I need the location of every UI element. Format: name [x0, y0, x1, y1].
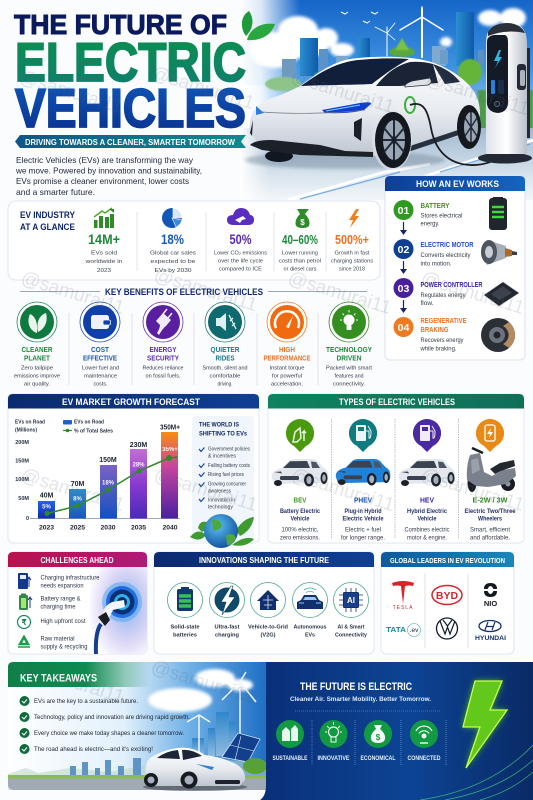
icon: bolt — [349, 209, 359, 228]
benefit: energy security: SECURITY — [147, 356, 179, 362]
benefit: cost effective: EFFECTIVE — [83, 356, 117, 362]
watermark: @samurai11 — [289, 67, 397, 118]
stat: 40-60%: Lower running — [282, 250, 318, 256]
heading: at a glance: AT A GLANCE — [20, 222, 75, 233]
step 1: battery: Stores electrical — [420, 212, 462, 220]
title: THE FUTURE OF — [14, 9, 227, 40]
callout: the world is shifting to EVs: Rising fuel prices — [208, 472, 244, 478]
panel: innovations shaping the future — [154, 552, 374, 654]
heading: THE FUTURE IS ELECTRIC — [300, 681, 412, 693]
legend: EVs on Road — [74, 420, 104, 426]
bar chart: 28% — [132, 462, 145, 468]
stat: 14M+: EVs sold — [91, 250, 117, 256]
intro text: and a smarter future. — [16, 187, 95, 197]
stat: 50%: Lower CO₂ emissions — [214, 250, 267, 256]
step 1: battery: energy. — [420, 220, 440, 228]
step 3: power controller: 03 — [398, 283, 409, 295]
callout: the world is shifting to EVs: Falling battery costs — [208, 463, 250, 469]
step 1: battery: 01 — [398, 205, 409, 217]
stat: 14M+: 14M+ — [88, 232, 120, 247]
header — [268, 394, 524, 408]
logo: Hyundai: HYUNDAI — [475, 636, 506, 642]
icon: recycling — [18, 637, 30, 647]
stat: 40-60%: costs than petrol — [279, 258, 321, 264]
takeaway list: The road ahead is electric—and it's exciting! — [34, 747, 153, 753]
callout: the world is shifting to EVs: technology — [208, 504, 233, 510]
type: BEV: Battery Electric — [280, 509, 321, 515]
innovation: solid-state batteries — [168, 582, 202, 638]
type: HEV: Hybrid Electric — [407, 509, 448, 515]
bar chart: 8% — [73, 496, 83, 502]
watermark: @samurai11 — [149, 657, 257, 708]
innovation: AI connectivity: AI & Smart — [338, 624, 365, 630]
logo: Tata.ev — [386, 624, 420, 636]
takeaway list: Every choice we make today shapes a cleaner tomorrow. — [34, 731, 184, 737]
watermark: @samurai11 — [289, 465, 397, 516]
value: innovative: INNOVATIVE — [318, 756, 350, 762]
stat: 18%: EVs by 2030 — [154, 268, 192, 274]
header: GLOBAL LEADERS IN EV REVOLUTION — [390, 556, 505, 565]
header — [154, 552, 374, 567]
bar chart: 0 — [26, 516, 29, 522]
step 1: battery: BATTERY — [420, 203, 450, 210]
panel: challenges ahead — [8, 552, 147, 654]
type: PHEV — [336, 419, 390, 542]
type: HEV: Vehicle — [418, 516, 437, 522]
panel: EV industry at a glance — [8, 201, 380, 280]
bar chart: 50M — [18, 496, 29, 502]
step 4: regenerative braking — [394, 317, 515, 352]
step 4: regenerative braking: while braking. — [420, 346, 457, 352]
icon: rupee coin: ₹ — [21, 618, 27, 627]
bar chart: 2025 — [70, 524, 85, 532]
benefit: high performance — [264, 302, 311, 388]
intro text: EVs promise a cleaner environment, lower costs — [16, 176, 189, 186]
step 4: regenerative braking: 04 — [398, 322, 409, 334]
innovation: solid-state batteries: Solid-state — [170, 624, 200, 630]
innovation: AI connectivity: Connectivity — [335, 632, 368, 638]
stat: 50% — [214, 232, 267, 272]
benefit: cost effective: COST — [91, 347, 110, 354]
step 3: power controller: Regulates energy — [420, 292, 466, 299]
bar chart: 18% — [102, 480, 115, 486]
step 3: power controller — [394, 278, 519, 307]
type: BEV: zero emissions. — [280, 536, 320, 542]
stat: 40-60%: or diesel cars — [284, 266, 317, 272]
innovation: autonomous EVs: EVs — [305, 632, 315, 638]
icon: money bag: $ — [300, 218, 305, 227]
subtitle ribbon: DRIVING TOWARDS A CLEANER, SMARTER TOMORROW — [25, 138, 235, 147]
type: E-2W / 3W — [464, 419, 516, 542]
benefit: energy security: Reduces reliance — [142, 366, 184, 372]
item: raw material: Raw material — [40, 636, 74, 642]
header: HOW AN EV WORKS — [416, 179, 499, 190]
icon: pie chart — [162, 208, 182, 228]
legend — [15, 420, 113, 434]
step 4: regenerative braking: BRAKING — [420, 327, 449, 334]
logo: Tata.ev: .ev — [410, 627, 419, 634]
innovation: ultra-fast charging — [210, 582, 244, 638]
heading — [290, 681, 431, 703]
benefit: cleaner planet: emissions improve — [14, 374, 60, 380]
step 2: electric motor: ELECTRIC MOTOR — [420, 242, 474, 249]
item: battery range — [40, 596, 80, 610]
panel: types of electric vehicles — [268, 394, 524, 543]
legend: EVs on Road — [15, 420, 45, 426]
benefit: high performance: for powerful — [272, 374, 302, 380]
watermark: @samurai11 — [286, 268, 394, 319]
bar chart: 100M — [15, 477, 29, 483]
benefit: quieter rides — [202, 302, 248, 388]
value: sustainable: SUSTAINABLE — [272, 756, 308, 762]
benefit: quieter rides: QUIETER — [210, 347, 240, 354]
benefit: high performance: Instant torque — [270, 366, 304, 372]
callout: the world is shifting to EVs: Government policies — [208, 446, 250, 452]
item: infrastructure: Charging infrastructure — [40, 576, 100, 582]
value: economical — [360, 720, 396, 762]
charging station — [410, 23, 532, 165]
car illustration — [143, 748, 247, 791]
callout: the world is shifting to EVs — [192, 416, 254, 543]
bar chart: 350M+ — [160, 424, 180, 432]
logo: NIO: NIO — [484, 599, 497, 608]
watermark: @samurai11 — [19, 657, 127, 708]
watermark: @samurai11 — [149, 63, 257, 114]
watermark: @samurai11 — [19, 465, 127, 516]
item: battery range: Battery range & — [40, 596, 80, 602]
step 3: power controller: flow. — [420, 300, 434, 307]
value: economical: ECONOMICAL — [360, 756, 396, 762]
legend: (Millions) — [15, 428, 37, 434]
value: economical: $ — [376, 733, 381, 742]
bar chart: 230M — [130, 442, 147, 449]
decorative streaks — [420, 745, 533, 800]
step 2: electric motor: 02 — [398, 244, 409, 256]
innovation: autonomous EVs: Autonomous — [294, 624, 326, 630]
icon: globe with leaves — [190, 514, 254, 548]
watermark: @samurai11 — [419, 268, 527, 319]
step 2: electric motor: into motion. — [420, 260, 452, 268]
plug illustration — [90, 567, 147, 654]
logo: Volkswagen — [436, 618, 458, 639]
header: CHALLENGES AHEAD — [40, 555, 114, 565]
step 3: power controller: POWER CONTROLLER — [420, 282, 482, 289]
benefit: high performance: acceleration. — [271, 382, 303, 388]
stat: 500%+: 500%+ — [335, 232, 369, 247]
callout: the world is shifting to EVs: & incentives — [208, 454, 236, 460]
benefit: technology driven: TECHNOLOGY — [326, 347, 372, 354]
type: E-2W / 3W: Wheelers — [478, 516, 503, 522]
intro text — [15, 155, 202, 197]
type: HEV: motor & engine. — [407, 536, 447, 542]
item: infrastructure — [40, 576, 100, 590]
item: raw material — [40, 636, 88, 650]
benefit: quieter rides: RIDES — [216, 356, 235, 362]
watermark: @samurai11 — [152, 465, 260, 516]
icon: leaves — [242, 11, 275, 40]
type: E-2W / 3W: and affordable. — [470, 536, 510, 542]
bar chart: 2023 — [39, 524, 54, 532]
callout: the world is shifting to EVs: THE WORLD IS — [199, 422, 239, 428]
step 2: electric motor — [394, 239, 517, 268]
value: connected: CONNECTED — [408, 756, 441, 762]
benefit: technology driven: features and — [334, 374, 364, 380]
type: PHEV: Electric Vehicle — [342, 516, 384, 522]
header: key takeaways: KEY TAKEAWAYS — [20, 672, 97, 684]
stat: 500%+: charging stations — [331, 258, 373, 264]
innovation: ultra-fast charging: Ultra-fast — [214, 624, 240, 630]
panel: key takeaways — [8, 662, 267, 791]
bar chart: 2035 — [131, 524, 146, 532]
type: E-2W / 3W: E-2W / 3W — [472, 496, 508, 504]
benefit: high performance: PERFORMANCE — [264, 356, 311, 362]
benefit: technology driven: connectivity. — [333, 382, 366, 388]
benefit: cost effective: maintenance — [84, 374, 117, 380]
bar chart: 5% — [42, 504, 52, 510]
stat: 18%: expected to be — [150, 259, 196, 265]
panel: global leaders — [381, 552, 514, 654]
stat: 500%+: since 2018 — [339, 266, 365, 272]
innovation: ultra-fast charging: charging — [215, 632, 239, 638]
scooter — [467, 448, 516, 492]
icon: growth chart — [94, 208, 114, 228]
takeaway list: Technology, policy and innovation are driving rapid growth. — [34, 715, 190, 721]
bar chart: 150M — [99, 457, 117, 464]
hero illustration: electric car charging in a city — [240, 0, 533, 200]
bar chart: 40M — [40, 492, 53, 500]
icon: neon lightning bolt — [463, 681, 507, 768]
logo: Tata.ev: TATA — [386, 625, 407, 634]
callout: the world is shifting to EVs: awareness — [208, 488, 231, 494]
benefit: cleaner planet: air quality. — [24, 382, 50, 388]
panel: the future is electric — [260, 662, 533, 800]
innovation: solid-state batteries: batteries — [173, 632, 197, 638]
watermark: @samurai11 — [19, 268, 127, 319]
type: PHEV: Electric + fuel — [345, 528, 381, 534]
header — [385, 176, 525, 191]
watermark — [17, 63, 532, 708]
type: HEV — [399, 419, 455, 542]
benefit: energy security: on fossil fuels. — [146, 374, 181, 380]
benefit: cleaner planet — [14, 302, 60, 388]
stat: 40-60% — [279, 232, 321, 272]
innovation: AI connectivity: AI — [347, 596, 355, 605]
type: PHEV: PHEV — [354, 496, 372, 504]
item: infrastructure: needs expansion — [40, 584, 84, 590]
logo: BYD: BYD — [436, 590, 459, 602]
benefit: high performance: HIGH — [279, 347, 295, 354]
watermark: @samurai11 — [17, 67, 125, 118]
item: upfront cost: High upfront cost — [40, 619, 86, 625]
innovation: vehicle-to-grid: (V2G) — [260, 632, 276, 638]
step 4: regenerative braking: Recovers energy — [420, 337, 464, 344]
step 1: battery — [394, 197, 507, 230]
electric car — [245, 57, 481, 170]
stat: 500%+: Growth in fast — [334, 250, 370, 256]
header: INNOVATIONS SHAPING THE FUTURE — [199, 555, 329, 565]
bar chart — [15, 424, 180, 532]
callout: the world is shifting to EVs: SHIFTING TO EVs — [199, 430, 247, 438]
scene: wind turbines, city and solar panel — [8, 669, 267, 790]
innovation: vehicle-to-grid: Vehicle-to-Grid — [248, 624, 288, 630]
title: VEHICLES — [15, 77, 246, 139]
type: BEV: BEV — [294, 496, 306, 504]
legend: % of Total Sales — [74, 428, 113, 434]
stat: 500%+ — [331, 232, 373, 272]
header: TYPES OF ELECTRIC VEHICLES — [339, 397, 455, 408]
takeaway list — [20, 696, 190, 754]
value: connected — [408, 720, 441, 762]
innovation: AI connectivity — [334, 582, 368, 638]
subtitle ribbon — [15, 135, 246, 148]
icon: battery — [19, 594, 32, 610]
benefit: energy security — [142, 302, 184, 380]
title — [14, 9, 246, 139]
value: innovative — [318, 720, 350, 762]
benefit: quieter rides: comfortable — [210, 374, 240, 380]
benefit: energy security: ENERGY — [150, 347, 177, 354]
stat: 18%: Global car sales — [150, 250, 196, 256]
heading: at a glance — [20, 210, 76, 233]
heading: key benefits: KEY BENEFITS OF ELECTRIC VEHICLES — [105, 287, 263, 297]
benefit: cost effective: costs. — [94, 382, 108, 388]
watermark: @samurai11 — [152, 265, 260, 316]
type: BEV: 100% electric, — [282, 528, 319, 534]
bar chart: 200M — [15, 440, 29, 446]
heading: Cleaner Air. Smarter Mobility. Better Tomorrow. — [290, 696, 431, 703]
stat: 18%: 18% — [161, 232, 184, 247]
innovation: autonomous EVs — [292, 582, 328, 638]
panel: how an EV works — [385, 176, 525, 360]
item: battery range: charging time — [40, 604, 76, 610]
stat: 50%: 50% — [230, 232, 252, 247]
stat: 14M+: worldwide in — [84, 259, 122, 265]
type: BEV: Vehicle — [290, 516, 310, 522]
type: HEV: Combines electric — [404, 528, 450, 534]
step arrows — [400, 222, 407, 313]
benefit: cleaner planet: Zero tailpipe — [21, 366, 53, 372]
innovation: vehicle-to-grid — [248, 582, 288, 638]
step 4: regenerative braking: REGENERATIVE — [420, 318, 467, 325]
heading: at a glance: EV INDUSTRY — [20, 210, 76, 221]
bar chart: 2040 — [162, 524, 178, 532]
benefit: cleaner planet: CLEANER — [22, 347, 52, 354]
step 2: electric motor: Converts electricity — [420, 252, 471, 259]
panel: EV market growth forecast — [8, 394, 259, 548]
icon: charging station — [18, 573, 31, 589]
icon: money bag — [295, 209, 310, 228]
benefit: quieter rides: driving. — [218, 382, 233, 388]
intro text: Electric Vehicles (EVs) are transforming the way — [16, 155, 194, 165]
type: PHEV: Plug-in Hybrid — [344, 509, 382, 515]
bar chart: 35%+ — [162, 447, 178, 453]
bar chart: 70M — [71, 481, 84, 488]
type: E-2W / 3W: Electric Two/Three — [464, 509, 516, 515]
icon: CO2 cloud — [227, 208, 254, 225]
item: raw material: supply & recycling — [40, 644, 88, 650]
value: sustainable — [272, 720, 308, 762]
bar chart: 2030 — [100, 524, 116, 532]
benefit: technology driven — [326, 302, 372, 388]
title: ELECTRIC — [15, 31, 246, 93]
benefit: technology driven: Packed with smart — [326, 366, 372, 372]
bar chart: 150M — [15, 458, 29, 464]
type: BEV — [272, 419, 328, 542]
type: E-2W / 3W: Smart, efficient — [470, 528, 510, 534]
stat: 14M+: 2023 — [97, 268, 111, 274]
benefit: technology driven: DRIVEN — [336, 356, 362, 362]
header: key takeaways — [8, 662, 150, 687]
stat: 18% — [150, 232, 196, 274]
stat: 50%: over the life cycle — [218, 258, 263, 264]
takeaway list: EVs are the key to a sustainable future. — [34, 699, 138, 705]
watermark: @samurai11 — [419, 465, 527, 516]
type: PHEV: for longer range. — [341, 536, 385, 542]
header — [8, 394, 259, 408]
stat: 50%: compared to ICE — [219, 266, 262, 272]
logo: Tesla: TESLA — [393, 605, 413, 611]
benefit: cost effective: Lower fuel and — [82, 366, 119, 372]
type: HEV: HEV — [420, 496, 434, 504]
benefit: quieter rides: Smooth, silent and — [202, 366, 248, 372]
benefit: cleaner planet: PLANET — [24, 356, 51, 362]
intro text: we move. Powered by innovation and sustainability, — [15, 166, 202, 176]
callout: the world is shifting to EVs: Innovation in — [208, 498, 235, 504]
panel: key benefits row — [14, 302, 372, 388]
stat: 40-60%: 40–60% — [282, 232, 318, 247]
benefit: cost effective — [80, 302, 120, 388]
stat: 14M+ — [84, 232, 122, 274]
watermark: @samurai11 — [424, 69, 532, 120]
header: EV MARKET GROWTH FORECAST — [62, 397, 200, 408]
callout: the world is shifting to EVs: Growing consumer — [208, 482, 246, 488]
